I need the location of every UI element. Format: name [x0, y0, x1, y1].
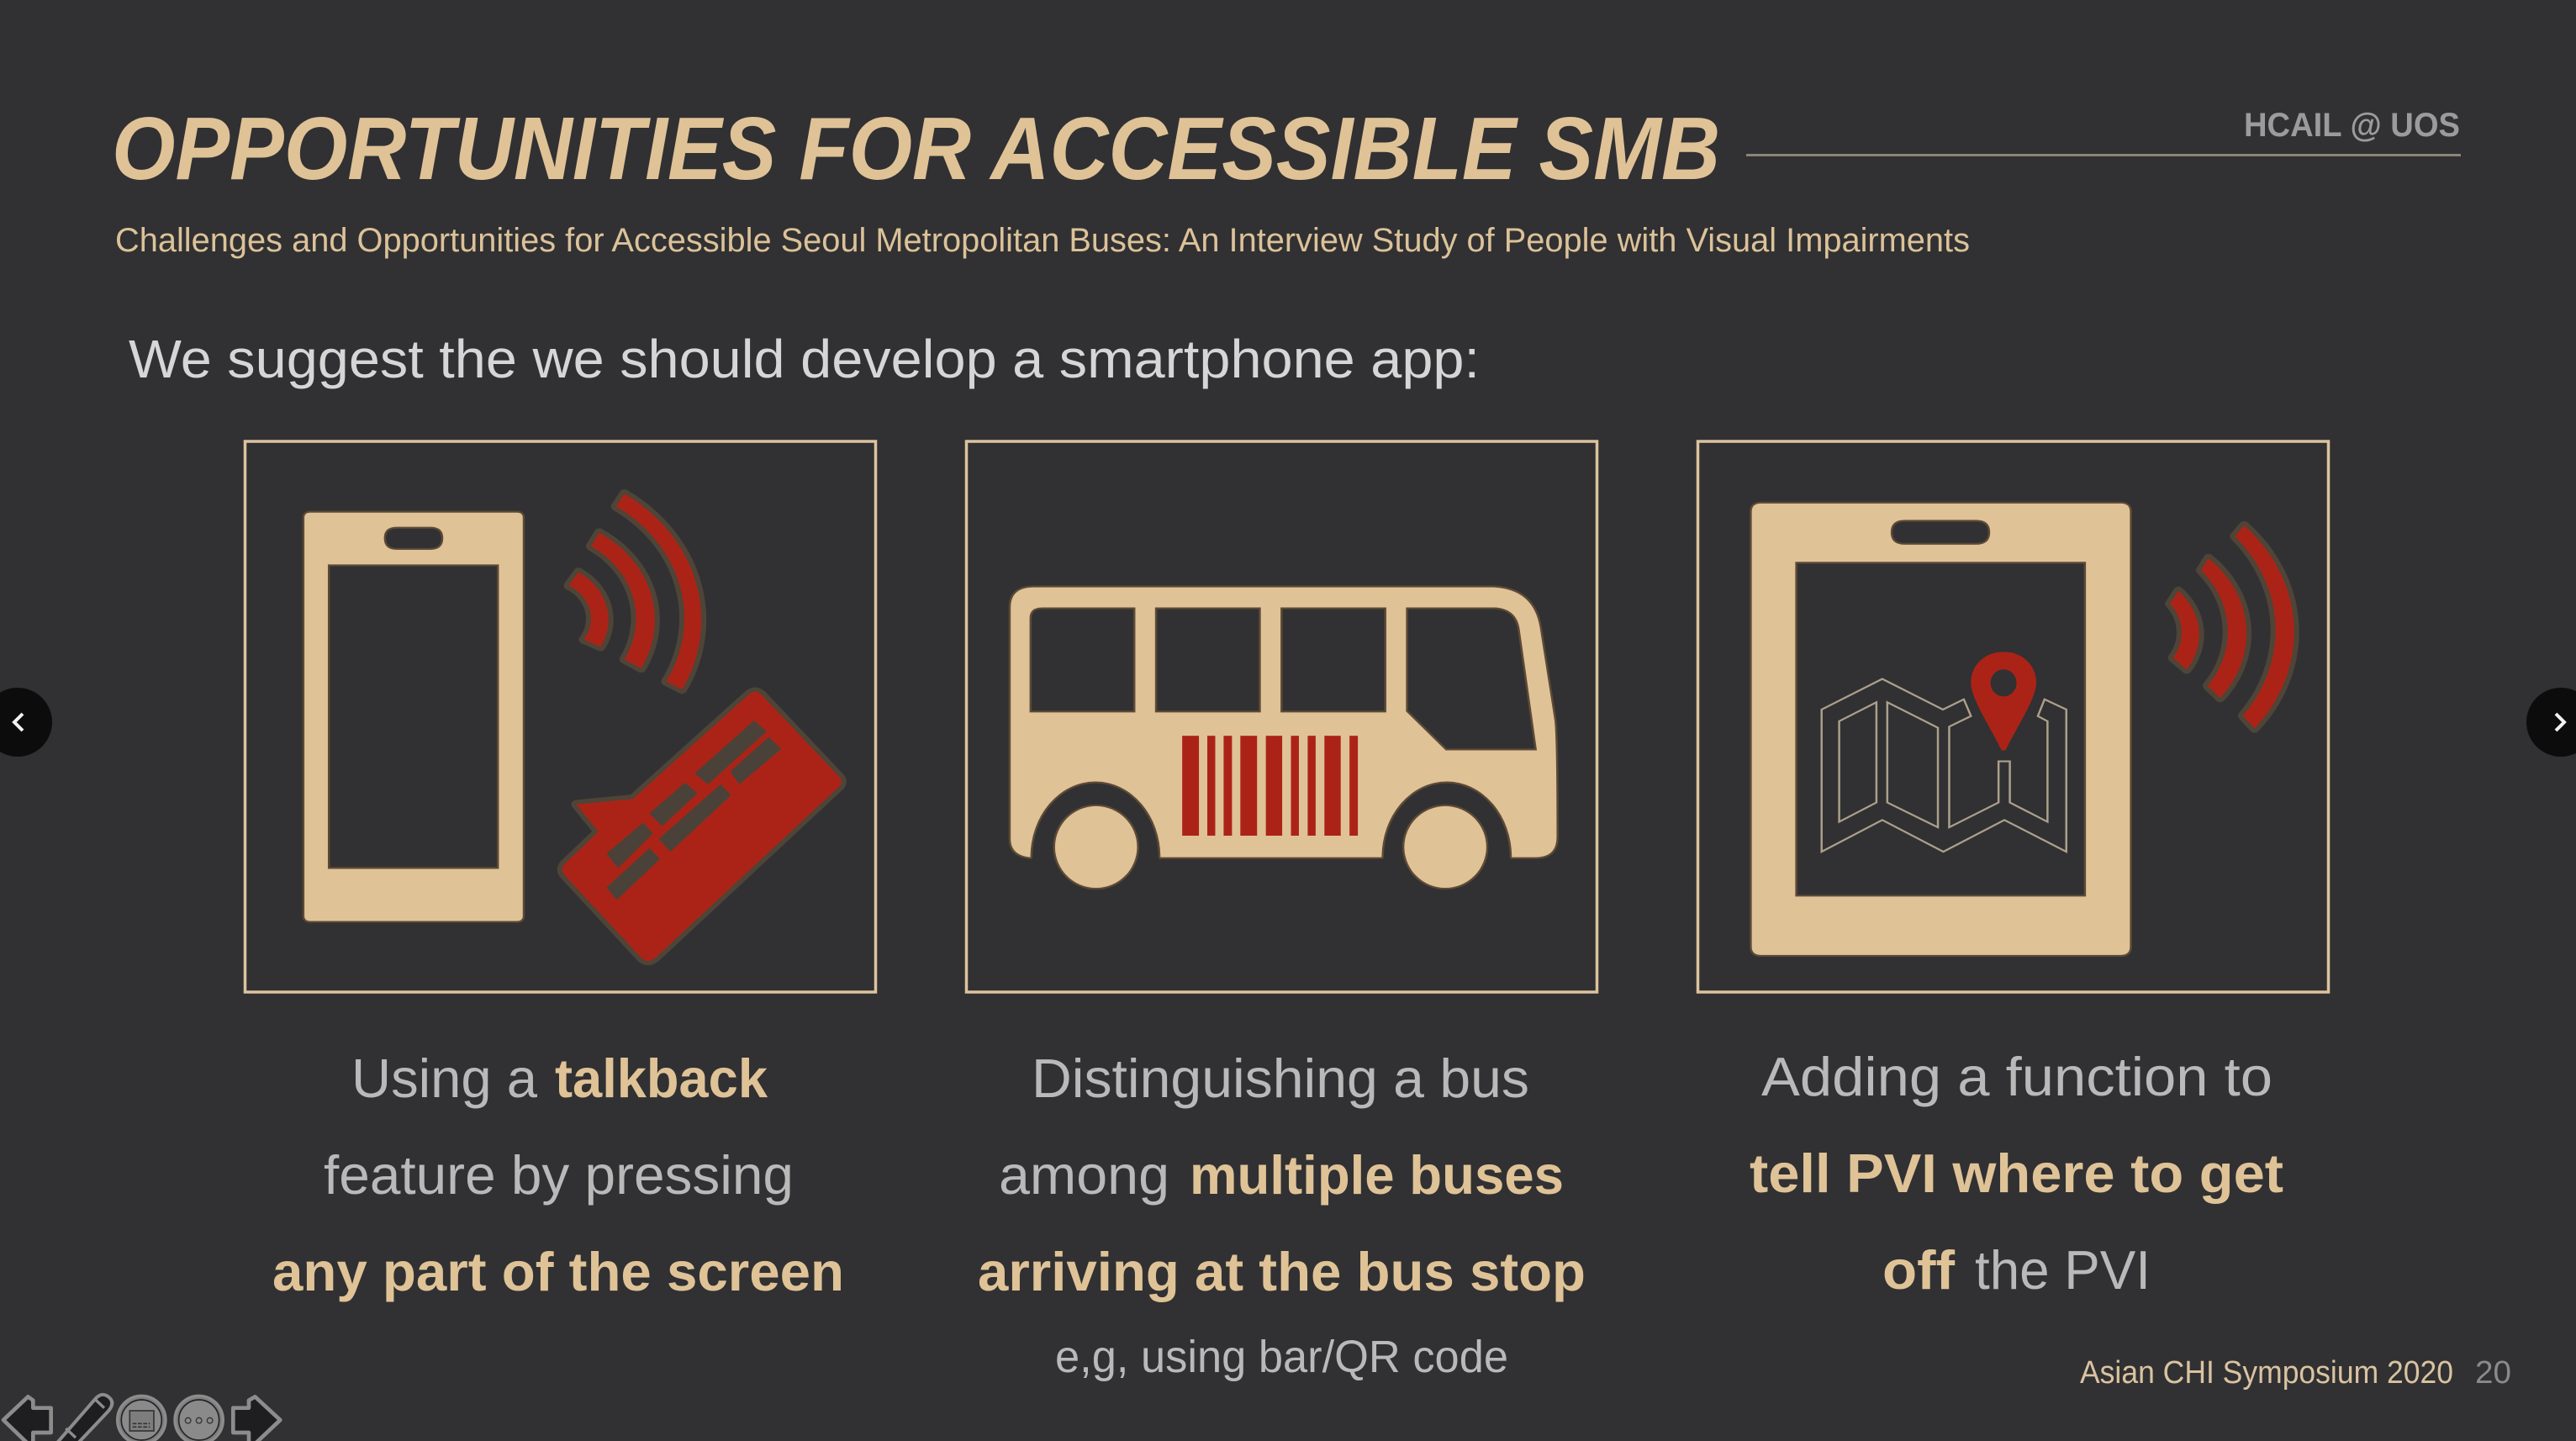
icon: back arrow: [3, 1396, 51, 1441]
caption: where to get off: off: [1882, 1239, 1955, 1301]
icon: keyboard speech bubble: [562, 692, 842, 961]
icon: sound waves: [569, 494, 701, 689]
caption: distinguishing a bus: among: [999, 1144, 1169, 1206]
button: next slide: [2526, 688, 2576, 757]
panel: talkback icon: [245, 441, 876, 992]
caption: talkback: any part of the screen: [272, 1241, 844, 1302]
caption: talkback: Using a: [351, 1048, 538, 1109]
icon: bus body: [1011, 588, 1556, 858]
icon: bus wheels: [1055, 806, 1486, 888]
caption: where to get off: Adding a function to: [1761, 1046, 2272, 1107]
subtitle: Challenges and Opportunities for Accessible Seoul Metropolitan Buses: An Interview Study of People with Visual Impairments: [115, 222, 1970, 259]
icon: barcode: [1182, 736, 1358, 836]
icon: phone: [304, 513, 523, 921]
slideshow toolbar: [3, 1395, 280, 1441]
caption: where to get off: [1750, 1046, 2283, 1301]
icon: forward arrow: [233, 1396, 280, 1441]
header rule: [1746, 154, 2461, 156]
footer: page number: 20: [2475, 1355, 2511, 1391]
icon: pen: [57, 1395, 112, 1441]
caption: distinguishing a bus: [978, 1048, 1586, 1382]
caption: distinguishing a bus: multiple buses: [1190, 1144, 1564, 1206]
panel: map tablet icon: [1698, 441, 2329, 992]
icon: tablet: [1752, 504, 2130, 955]
affiliation label: HCAIL @ UOS: [2244, 107, 2460, 144]
icon: subtitles button: [118, 1396, 166, 1441]
icon: more options button: [175, 1396, 223, 1441]
caption: talkback: feature by pressing: [324, 1144, 794, 1206]
icon: sound waves: [2170, 525, 2294, 729]
caption: talkback: [272, 1048, 844, 1302]
icon: folded map: [1822, 679, 2067, 852]
title: OPPORTUNITIES FOR ACCESSIBLE SMB: [112, 99, 1720, 198]
footer: conference name: Asian CHI Symposium 2020: [2080, 1355, 2453, 1391]
panel: bus icon: [967, 441, 1597, 992]
caption: distinguishing a bus: arriving at the bus stop: [978, 1241, 1586, 1302]
button: previous slide: [0, 688, 52, 757]
caption: distinguishing a bus: Distinguishing a bus: [1032, 1048, 1529, 1109]
intro sentence: We suggest the we should develop a smartphone app:: [129, 329, 1480, 389]
caption: where to get off: the PVI: [1975, 1239, 2151, 1301]
caption: talkback: talkback: [555, 1048, 768, 1109]
icon: location pin: [1971, 652, 2036, 751]
caption: distinguishing a bus: e,g, using bar/QR code: [1055, 1332, 1508, 1382]
caption: where to get off: tell PVI where to get: [1750, 1143, 2283, 1204]
